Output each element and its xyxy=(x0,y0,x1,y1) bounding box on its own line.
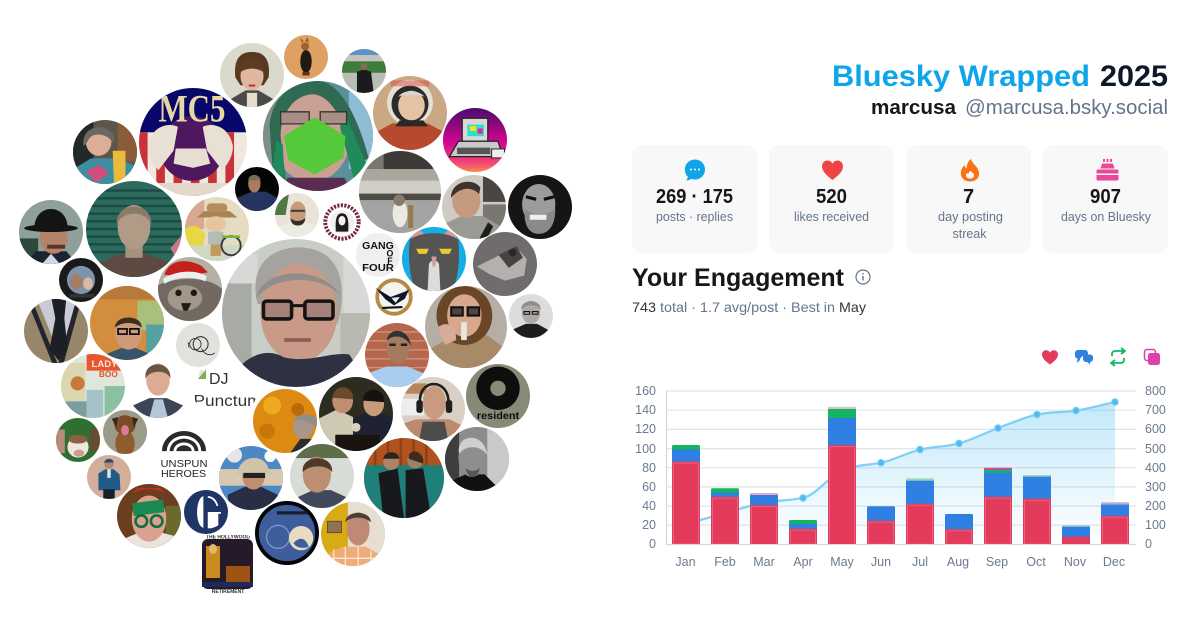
avatar: stadium xyxy=(342,49,386,93)
right axis labels: 100 xyxy=(1145,518,1166,532)
right axis labels: 200 xyxy=(1145,499,1166,513)
bar: Jan xyxy=(672,445,700,544)
avatar: tQ logo xyxy=(176,323,220,367)
avatar: main profile portrait xyxy=(222,239,370,387)
avatar: cat with santa hat xyxy=(158,257,222,321)
avatar: Ladybird book covers: LADY xyxy=(91,359,118,370)
bar: Sep xyxy=(984,468,1012,544)
month labels: Dec xyxy=(1103,555,1125,569)
icon: legend heart xyxy=(1042,350,1058,364)
month labels: Jun xyxy=(871,555,891,569)
left axis labels: 120 xyxy=(635,422,656,436)
bar: May xyxy=(828,407,856,544)
left axis labels: 140 xyxy=(635,403,656,417)
avatar: Hollywood album cover: RETIREMENT xyxy=(212,589,244,595)
avatar: Unspun Heroes logo xyxy=(160,431,208,480)
bar: Oct xyxy=(1023,475,1051,544)
right axis labels: 600 xyxy=(1145,422,1166,436)
stat card: posts and replies xyxy=(632,145,757,253)
avatar: woman with bob xyxy=(220,43,284,107)
month labels xyxy=(675,555,1125,569)
bar: Jun xyxy=(867,506,895,544)
avatar: woman with headphones xyxy=(401,377,465,441)
stat card: posting streak: streak xyxy=(952,226,987,241)
month labels: Sep xyxy=(986,555,1008,569)
right axis labels: 800 xyxy=(1145,384,1166,398)
stat card: posting streak: 7 xyxy=(963,186,974,208)
avatar: man in bucket hat xyxy=(219,446,283,510)
left axis labels: 40 xyxy=(642,499,656,513)
avatar: Gagarin cosmonaut xyxy=(373,76,447,150)
bar: Jul xyxy=(906,478,934,544)
avatar: magpie logo xyxy=(375,278,413,316)
right axis labels: 300 xyxy=(1145,480,1166,494)
avatar: MC5 album art xyxy=(139,87,247,196)
avatar: broken image DJ Punctum: Punctum xyxy=(194,393,262,410)
avatar: pixel computer xyxy=(443,108,507,172)
avatar: man in blue cardigan xyxy=(87,455,131,500)
line points xyxy=(800,399,1118,501)
avatar: pub scene with two men xyxy=(319,377,393,451)
engagement summary: 743 xyxy=(632,299,656,315)
cumulative area xyxy=(686,402,1115,544)
avatar: Gang of Four logo: GANG xyxy=(362,240,394,252)
stacked bars xyxy=(672,407,1129,544)
avatar: man in suit and dark tie xyxy=(24,299,88,363)
section heading: Your Engagement xyxy=(632,264,845,292)
left axis labels xyxy=(635,384,656,551)
avatar: tQ logo: t xyxy=(187,341,190,350)
avatar: Gang of Four logo: F xyxy=(387,256,393,266)
avatar: brown dog xyxy=(103,410,147,457)
cumulative line xyxy=(686,402,1115,524)
bar: Nov xyxy=(1062,525,1090,544)
stat card: posts and replies: 269 · 175 xyxy=(656,186,733,208)
avatar: white-haired man in glasses xyxy=(509,294,553,338)
avatar: curly haired man drinking xyxy=(425,286,507,368)
avatar: orange figurine xyxy=(284,35,328,79)
stat card: likes received: likes received xyxy=(794,209,869,224)
user handle: marcusa xyxy=(871,97,957,119)
left axis labels: 0 xyxy=(649,537,656,551)
icon: legend replies xyxy=(1075,350,1093,364)
avatar: man against orange leaves xyxy=(253,389,317,453)
right axis labels: 500 xyxy=(1145,442,1166,456)
icon: flame xyxy=(961,159,979,182)
bar: Apr xyxy=(789,520,817,544)
month labels: Nov xyxy=(1064,555,1087,569)
avatar: cat on pavement xyxy=(359,151,441,233)
avatar: man by brick wall xyxy=(365,323,429,387)
avatar: broken image DJ Punctum xyxy=(194,369,256,406)
icon: cake xyxy=(1096,159,1118,180)
chart: monthly engagement xyxy=(635,384,1166,569)
avatar: cow xyxy=(56,418,100,462)
month labels: Aug xyxy=(947,555,969,569)
month labels: Jul xyxy=(912,555,928,569)
right axis labels xyxy=(1145,384,1166,551)
avatar: round badge with two men xyxy=(59,258,103,302)
bar: Dec xyxy=(1101,502,1129,544)
month labels: May xyxy=(830,555,855,569)
stat card: days on Bluesky: days on Bluesky xyxy=(1061,209,1151,224)
avatar: person in green mask and green braids xyxy=(263,81,373,191)
avatar: resident logo: resident xyxy=(477,411,520,422)
icon: legend reposts xyxy=(1111,348,1125,366)
left axis labels: 60 xyxy=(642,480,656,494)
avatar: Hollywood album cover: THE HOLLYWOOD xyxy=(206,534,250,540)
avatar: man with party glasses xyxy=(117,484,181,548)
avatar: man in suit on white xyxy=(133,364,183,418)
bar: Feb xyxy=(711,488,739,544)
stat card: posting streak xyxy=(906,145,1031,253)
stat card: days on Bluesky: 907 xyxy=(1090,186,1121,208)
avatar: duo on teal sofa xyxy=(364,438,444,518)
avatar: maroon ornate logo xyxy=(323,203,361,241)
avatar: broken image DJ Punctum: DJ xyxy=(209,371,229,388)
avatar: man in bowler hat xyxy=(19,200,83,264)
avatar: older man black and white xyxy=(445,427,509,491)
month labels: Apr xyxy=(793,555,813,569)
user handle: @marcusa.bsky.social xyxy=(965,97,1168,119)
avatar: man in front of map xyxy=(90,286,164,360)
icon: heart xyxy=(822,160,843,180)
avatar: Ladybird book covers: BOO xyxy=(99,369,118,379)
left axis labels: 20 xyxy=(642,518,656,532)
avatar: Unspun Heroes logo: UNSPUN xyxy=(160,458,208,470)
stat card: likes received xyxy=(769,145,894,253)
right axis labels: 0 xyxy=(1145,537,1152,551)
avatar: man in snow xyxy=(290,444,354,508)
avatar: animal crossing character xyxy=(185,197,249,261)
avatar: Guardian G logo xyxy=(184,490,228,534)
icon: legend quotes xyxy=(1144,350,1160,365)
avatar: Ladybird book covers xyxy=(61,354,125,418)
stat card: likes received: 520 xyxy=(816,186,847,208)
bar: Aug xyxy=(945,514,973,544)
avatar: Gang of Four logo xyxy=(356,233,400,277)
icon: info xyxy=(856,270,870,284)
stat card: posts and replies: posts · replies xyxy=(656,209,733,224)
avatar: man on black background xyxy=(235,167,279,211)
engagement summary: total · 1.7 avg/post · Best in xyxy=(660,299,835,315)
avatar: blue space station xyxy=(255,501,319,565)
engagement summary: May xyxy=(839,299,866,315)
avatar: grey cartoon cat xyxy=(402,226,466,291)
avatar: Unspun Heroes logo: HEROES xyxy=(161,468,206,480)
avatar: grey stipple bird drawing xyxy=(473,232,537,296)
title: Bluesky Wrapped xyxy=(832,60,1090,93)
avatar: bearded man black and white xyxy=(508,175,572,239)
avatar: man with photos xyxy=(442,175,506,239)
avatar: man with green stripes background xyxy=(86,181,182,277)
avatar: bald man with beard xyxy=(275,193,319,237)
month labels: Feb xyxy=(714,555,736,569)
right axis labels: 400 xyxy=(1145,461,1166,475)
stat card: posting streak: day posting xyxy=(938,209,1003,224)
grid xyxy=(666,391,1136,525)
avatar: resident logo xyxy=(466,364,530,428)
user handle xyxy=(871,97,1168,119)
left axis labels: 160 xyxy=(635,384,656,398)
avatar: MC5 album art: MC5 xyxy=(158,87,225,130)
stat card: days on Bluesky xyxy=(1043,145,1168,253)
chart legend xyxy=(1042,348,1160,366)
avatar bubble cluster xyxy=(19,35,572,595)
month labels: Jan xyxy=(675,555,696,569)
avatar: Gang of Four logo: FOUR xyxy=(362,262,394,274)
icon: speech bubble xyxy=(685,159,705,180)
bar: Mar xyxy=(750,493,778,544)
avatar: man in plaid shirt xyxy=(321,502,385,566)
avatar: Gang of Four logo: O xyxy=(386,248,393,258)
month labels: Mar xyxy=(753,555,775,569)
avatar: woman with guitar xyxy=(73,120,137,184)
left axis labels: 80 xyxy=(642,461,656,475)
left axis labels: 100 xyxy=(635,442,656,456)
avatar: Hollywood album cover xyxy=(202,534,253,595)
title: 2025 xyxy=(1100,60,1168,93)
right axis labels: 700 xyxy=(1145,403,1166,417)
month labels: Oct xyxy=(1026,555,1046,569)
